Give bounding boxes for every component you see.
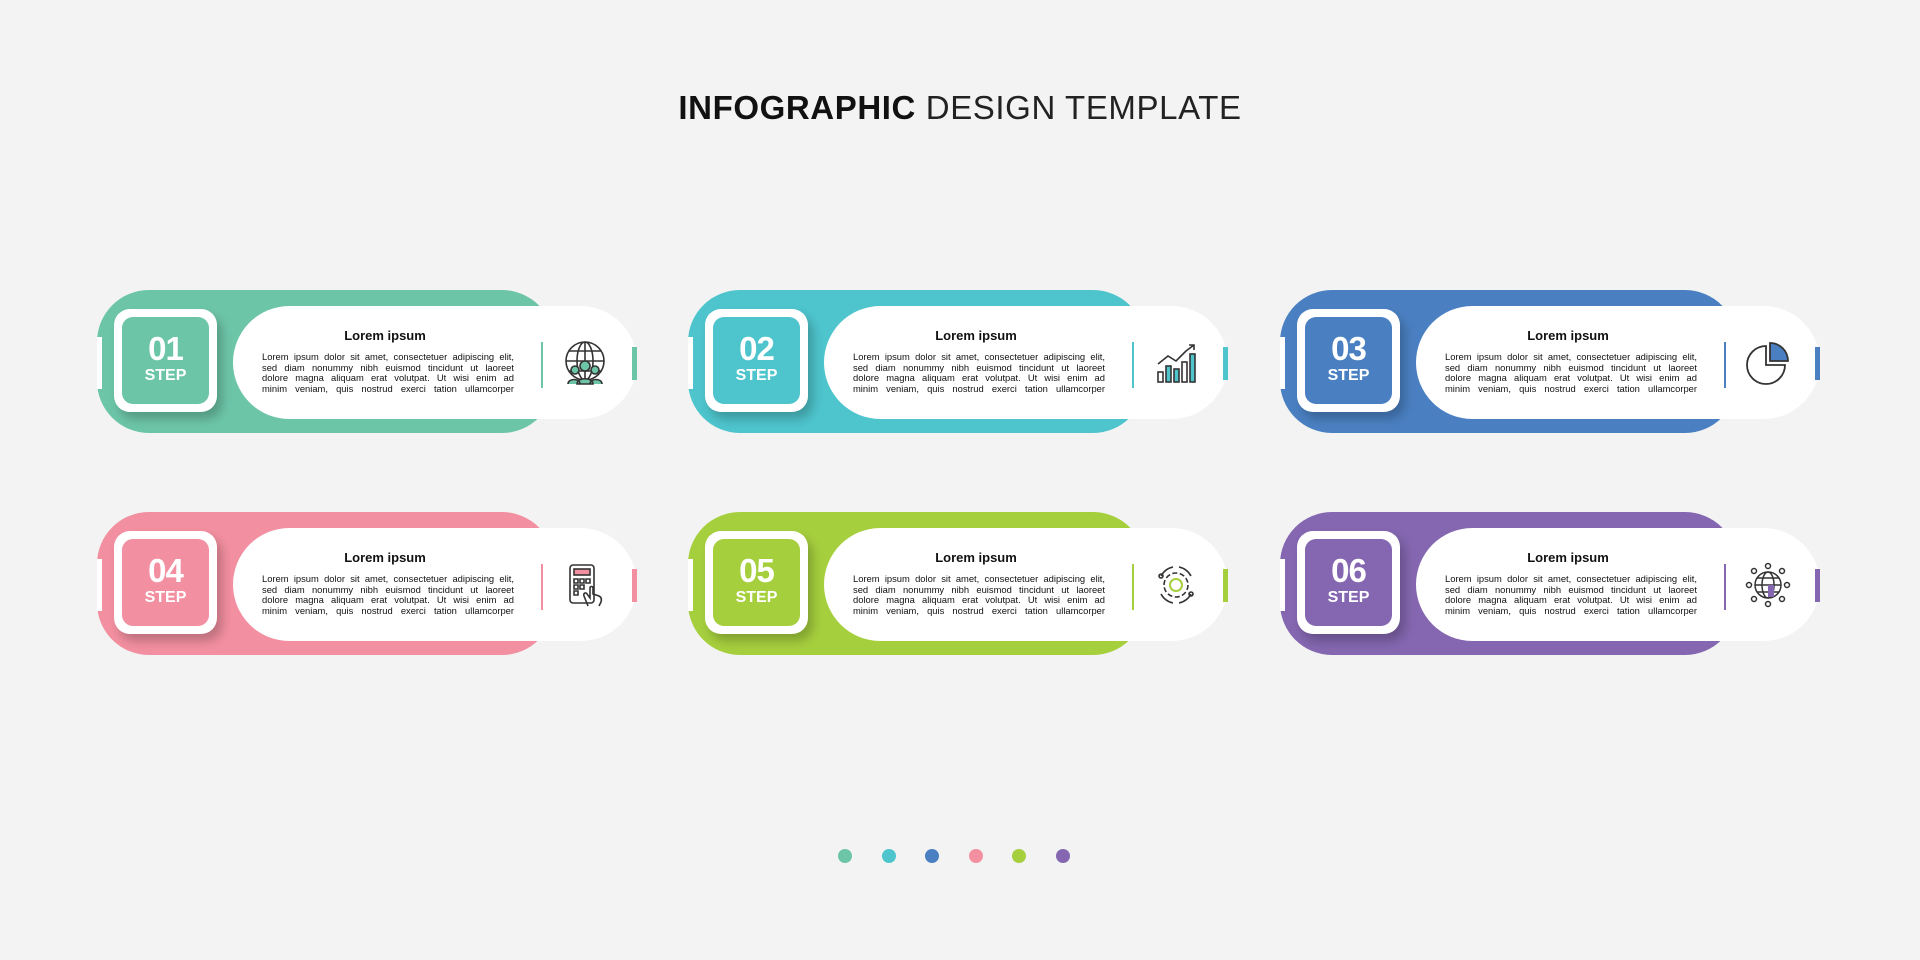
body text	[853, 573, 1105, 616]
card: step 02	[688, 290, 1228, 433]
body text	[262, 573, 514, 616]
step badge 04	[114, 531, 217, 634]
body text: dolore magna aliquam erat volutpat. Ut wisi enim ad	[1445, 372, 1697, 383]
icon: pie chart	[1746, 342, 1789, 385]
icon: gear cycle	[1158, 566, 1194, 604]
step badge 06	[1297, 531, 1400, 634]
body text: sed diam nonummy nibh euismod tincidunt ut laoreet	[853, 584, 1105, 595]
body text	[1445, 573, 1697, 616]
body text	[1445, 351, 1697, 394]
step badge 01: 01	[148, 330, 183, 367]
legend dots	[838, 849, 1070, 863]
step badge 04: STEP	[145, 589, 186, 606]
body text: sed diam nonummy nibh euismod tincidunt ut laoreet	[1445, 362, 1697, 373]
step badge 06: STEP	[1328, 589, 1369, 606]
step badge 04: 04	[148, 552, 183, 589]
body text: minim veniam, quis nostrud exerci tation ullamcorper	[853, 605, 1105, 616]
body text	[853, 351, 1105, 394]
step badge 02	[705, 309, 808, 412]
step badge 06: 06	[1331, 552, 1366, 589]
card: step 01	[97, 290, 637, 433]
body text: Lorem ipsum dolor sit amet, consectetuer adipiscing elit,	[853, 573, 1105, 584]
heading: Lorem ipsum	[1527, 328, 1609, 343]
card: step 03	[1280, 290, 1820, 433]
icon: growth chart	[1157, 344, 1196, 383]
body text: sed diam nonummy nibh euismod tincidunt ut laoreet	[1445, 584, 1697, 595]
heading: Lorem ipsum	[344, 328, 426, 343]
step badge 05: STEP	[736, 589, 777, 606]
body text: Lorem ipsum dolor sit amet, consectetuer adipiscing elit,	[1445, 351, 1697, 362]
heading: Lorem ipsum	[1527, 550, 1609, 565]
body text: dolore magna aliquam erat volutpat. Ut wisi enim ad	[853, 594, 1105, 605]
card: step 05	[688, 512, 1228, 655]
body text: Lorem ipsum dolor sit amet, consectetuer adipiscing elit,	[262, 573, 514, 584]
body text: sed diam nonummy nibh euismod tincidunt ut laoreet	[853, 362, 1105, 373]
title: INFOGRAPHIC DESIGN TEMPLATE	[678, 89, 1242, 126]
step badge 03: 03	[1331, 330, 1366, 367]
body text: dolore magna aliquam erat volutpat. Ut wisi enim ad	[262, 594, 514, 605]
heading: Lorem ipsum	[935, 550, 1017, 565]
body text: minim veniam, quis nostrud exerci tation ullamcorper	[1445, 383, 1697, 394]
icon: network globe	[1746, 562, 1790, 608]
body text: minim veniam, quis nostrud exerci tation ullamcorper	[262, 383, 514, 394]
step badge 01: STEP	[145, 367, 186, 384]
step badge 03: STEP	[1328, 367, 1369, 384]
body text: sed diam nonummy nibh euismod tincidunt ut laoreet	[262, 362, 514, 373]
heading: Lorem ipsum	[935, 328, 1017, 343]
body text: sed diam nonummy nibh euismod tincidunt ut laoreet	[262, 584, 514, 595]
icon: calculator hand	[569, 564, 602, 606]
body text: dolore magna aliquam erat volutpat. Ut wisi enim ad	[853, 372, 1105, 383]
card: step 06	[1280, 512, 1820, 655]
step badge 05	[705, 531, 808, 634]
step badge 03	[1297, 309, 1400, 412]
step badge 02: STEP	[736, 367, 777, 384]
icon: globe with people	[565, 341, 605, 385]
step badge 02: 02	[739, 330, 774, 367]
body text	[262, 351, 514, 394]
body text: Lorem ipsum dolor sit amet, consectetuer adipiscing elit,	[853, 351, 1105, 362]
body text: minim veniam, quis nostrud exerci tation ullamcorper	[1445, 605, 1697, 616]
card: step 04	[97, 512, 637, 655]
body text: minim veniam, quis nostrud exerci tation ullamcorper	[853, 383, 1105, 394]
body text: minim veniam, quis nostrud exerci tation ullamcorper	[262, 605, 514, 616]
body text: Lorem ipsum dolor sit amet, consectetuer adipiscing elit,	[1445, 573, 1697, 584]
body text: dolore magna aliquam erat volutpat. Ut wisi enim ad	[1445, 594, 1697, 605]
body text: Lorem ipsum dolor sit amet, consectetuer adipiscing elit,	[262, 351, 514, 362]
step badge 01	[114, 309, 217, 412]
step badge 05: 05	[739, 552, 774, 589]
heading: Lorem ipsum	[344, 550, 426, 565]
body text: dolore magna aliquam erat volutpat. Ut wisi enim ad	[262, 372, 514, 383]
